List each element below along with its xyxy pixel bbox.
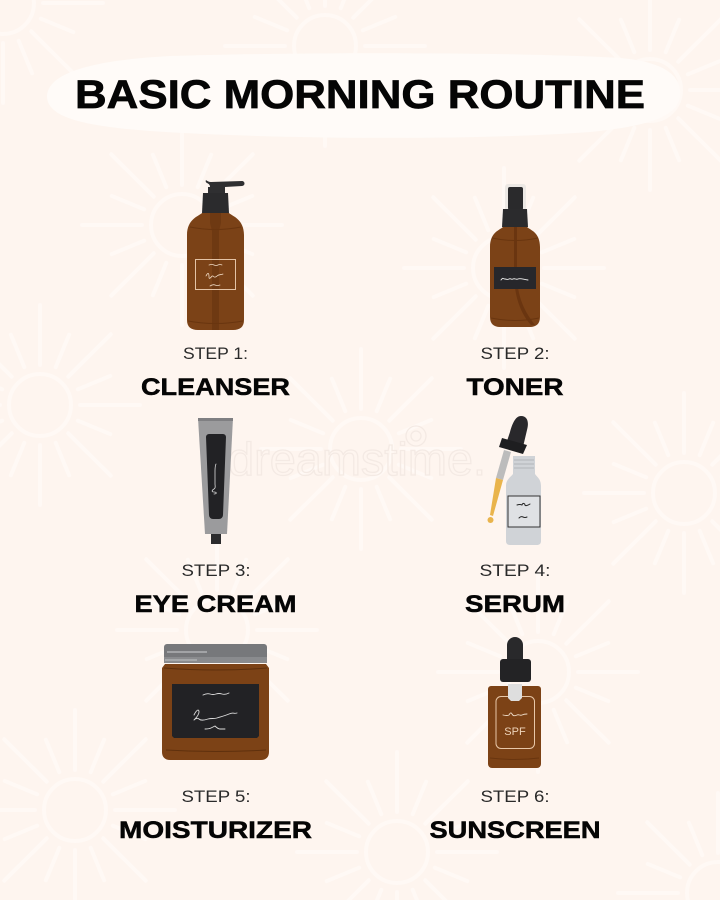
step 5: moisturizer xyxy=(119,644,312,844)
step label: STEP 1: xyxy=(183,344,248,363)
product name: SERUM xyxy=(465,591,565,618)
step label: STEP 6: xyxy=(480,787,550,806)
step label: STEP 2: xyxy=(480,344,550,363)
product name: MOISTURIZER xyxy=(119,817,312,844)
product name: CLEANSER xyxy=(141,374,290,401)
icon: spray bottle xyxy=(490,184,540,327)
icon: spf dropper bottle xyxy=(488,637,541,768)
step 4: serum xyxy=(465,416,565,618)
step 2: toner xyxy=(466,184,564,401)
spf label: SPF xyxy=(504,726,526,738)
watermark: dreamstime. xyxy=(228,433,486,485)
step label: STEP 5: xyxy=(182,787,250,806)
product name: EYE CREAM xyxy=(134,591,296,618)
step 3: eye cream xyxy=(134,418,296,618)
icon: dropper bottle xyxy=(488,416,541,545)
product name: TONER xyxy=(466,374,564,401)
icon: tube xyxy=(198,418,233,544)
product name: SUNSCREEN xyxy=(430,817,600,844)
step label: STEP 3: xyxy=(182,561,250,580)
step 1: cleanser xyxy=(141,180,290,401)
title banner xyxy=(47,53,680,138)
title: BASIC MORNING ROUTINE xyxy=(75,73,645,117)
step label: STEP 4: xyxy=(480,561,550,580)
icon: pump bottle xyxy=(187,180,244,330)
step 6: sunscreen xyxy=(430,637,600,844)
icon: jar xyxy=(162,644,269,760)
